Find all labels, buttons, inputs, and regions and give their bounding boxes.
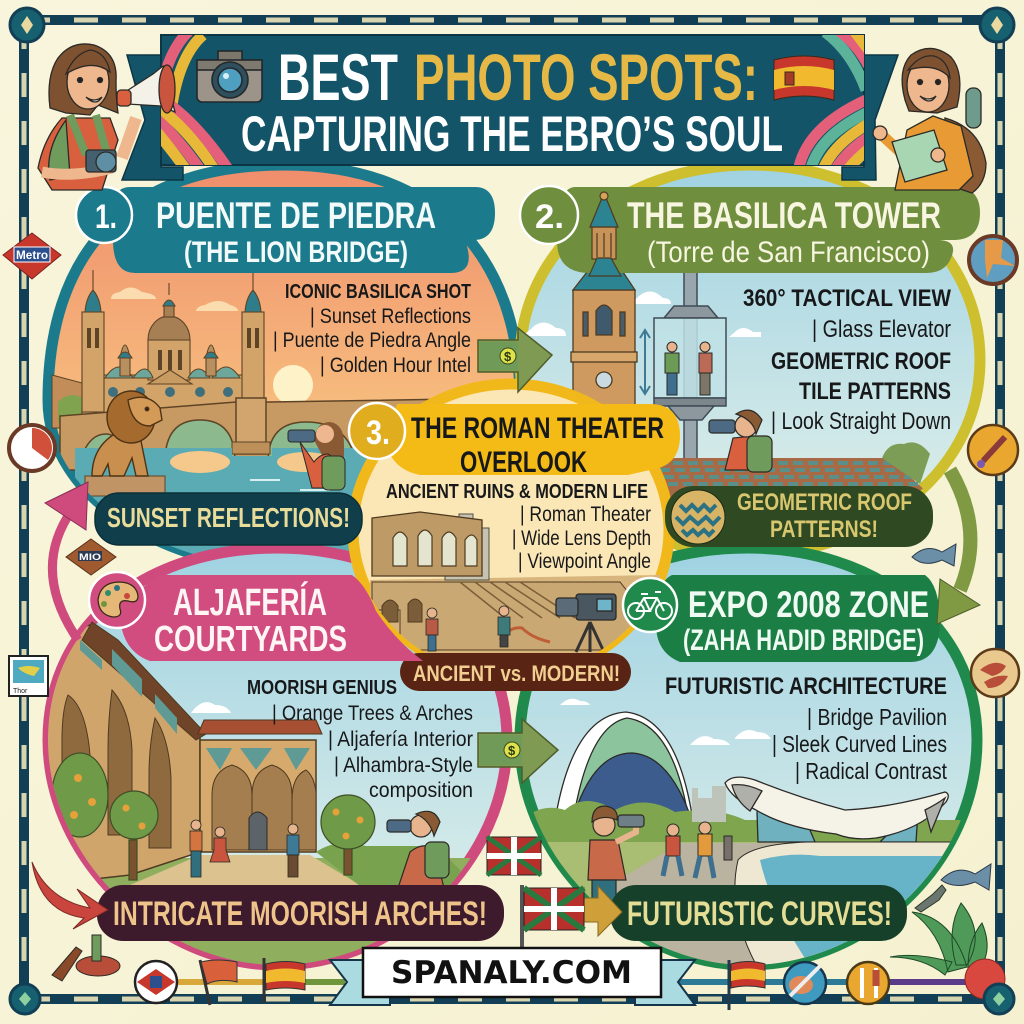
arrow: money arrow 4 to 5 xyxy=(478,719,558,783)
panel: spot 5 Expo 2008 zone xyxy=(520,548,980,973)
basilica xyxy=(82,270,264,420)
expo visitors xyxy=(663,822,732,878)
icon: camera xyxy=(197,51,262,102)
icon: palette roundel xyxy=(784,962,826,1004)
heading 3: THE ROMAN THEATER xyxy=(411,412,664,445)
text block 3: | Wide Lens Depth xyxy=(512,527,651,550)
illustration: expo architecture xyxy=(520,699,980,973)
callout: intricate moorish arches: INTRICATE MOORISH ARCHES! xyxy=(113,895,487,933)
text block 4: composition xyxy=(369,779,473,802)
title banner xyxy=(122,28,898,180)
icon: Spain flag xyxy=(774,56,834,100)
roof tiles xyxy=(660,442,930,498)
banner tails xyxy=(122,55,898,180)
glass elevator xyxy=(654,272,726,462)
text block 4: | Alhambra-Style xyxy=(334,754,473,777)
text block 5: | Bridge Pavilion xyxy=(807,704,947,730)
badge 3: 3. xyxy=(366,414,390,452)
lion statue xyxy=(92,391,162,476)
text block 5: FUTURISTIC ARCHITECTURE xyxy=(665,673,947,700)
callout: ancient vs modern xyxy=(400,653,631,691)
text block 5: | Sleek Curved Lines xyxy=(772,731,947,757)
header pill 3: OVERLOOK xyxy=(460,446,587,479)
photographer 5 xyxy=(588,806,644,910)
photographer on roof xyxy=(709,410,772,472)
badge 1: 1. xyxy=(95,198,117,236)
callout: geometric roof patterns: PATTERNS! xyxy=(770,516,878,543)
header band 4 xyxy=(89,572,423,661)
arrow: money arrow 1 to 2 xyxy=(478,328,552,392)
character: girl with map xyxy=(873,48,986,193)
badge 3 xyxy=(349,403,405,459)
text block 2 xyxy=(743,285,951,435)
panel: spot 3 Roman theater xyxy=(353,384,669,690)
callout: intricate moorish arches xyxy=(97,885,504,941)
callout: futuristic curves xyxy=(610,885,907,941)
text block 4: | Orange Trees & Arches xyxy=(272,702,473,725)
icon: metro diamond top xyxy=(3,233,61,279)
icon: clock xyxy=(9,425,55,471)
header pill 3 xyxy=(349,403,680,479)
callout: geometric roof patterns xyxy=(665,486,933,547)
badge 1 xyxy=(76,187,132,243)
photographer 4 xyxy=(387,811,449,888)
title text: BEST xyxy=(278,40,398,114)
icon: leaves xyxy=(890,903,987,975)
text block 4: | Aljafería Interior xyxy=(328,728,473,751)
character: girl with megaphone xyxy=(38,44,175,190)
text block 4: MOORISH GENIUS xyxy=(247,677,397,699)
icon: tile pattern xyxy=(671,490,725,544)
icon: flags bottom left xyxy=(200,958,305,1005)
icon: tools and food xyxy=(52,935,120,981)
arrow: olive curved 2 to 5 xyxy=(937,470,980,624)
text block 1 xyxy=(273,281,471,377)
illustration: basilica and lion bridge xyxy=(52,270,430,554)
water xyxy=(75,448,367,554)
banner: spanaly.com xyxy=(330,948,695,1005)
illustration: roman ruins xyxy=(370,511,660,653)
header pill 2 xyxy=(520,186,980,276)
text block 3: | Viewpoint Angle xyxy=(518,550,651,573)
text block 2: GEOMETRIC ROOF xyxy=(771,348,951,375)
rainbow corners xyxy=(161,35,864,165)
corner badge bottom right xyxy=(984,984,1014,1014)
title banner: CAPTURING THE EBRO’S SOUL xyxy=(241,106,783,162)
icon: compass xyxy=(969,236,1017,284)
theater visitors xyxy=(426,606,510,651)
bridge pavilion xyxy=(725,777,948,842)
text block 2: | Glass Elevator xyxy=(812,316,951,343)
header pill 1: (THE LION BRIDGE) xyxy=(184,236,408,269)
badge 2 xyxy=(520,186,578,244)
text block 1: ICONIC BASILICA SHOT xyxy=(285,281,471,303)
callout: futuristic curves: FUTURISTIC CURVES! xyxy=(627,895,892,933)
church tower xyxy=(571,272,637,415)
arrow: red curved xyxy=(32,862,108,929)
panel: spot 2 Basilica tower xyxy=(520,165,980,555)
arrow: money arrow 1 to 2: $ xyxy=(504,349,512,364)
icon: map card: Thor xyxy=(13,688,28,695)
icon: Basque flag small xyxy=(487,837,541,875)
arrow: gold xyxy=(578,886,622,936)
text block 3: ANCIENT RUINS & MODERN LIFE xyxy=(386,481,648,503)
icon: map card xyxy=(9,656,48,696)
icon: metro diamond middle: MIO xyxy=(79,552,101,562)
panel: spot 1 Puente de Piedra xyxy=(48,165,530,575)
text block 2: | Look Straight Down xyxy=(771,408,951,435)
expo dome xyxy=(556,712,692,815)
callout: ancient vs modern: ANCIENT vs. MODERN! xyxy=(413,661,620,686)
icon: flashlight xyxy=(915,885,946,912)
header pill 2: (Torre de San Francisco) xyxy=(647,236,930,269)
header pill 5 xyxy=(623,575,940,662)
stone bridge xyxy=(59,398,430,471)
text block 1: | Puente de Piedra Angle xyxy=(273,329,471,352)
banner: spanaly.com: SPANALY.COM xyxy=(391,955,632,991)
icon: cutlery roundel xyxy=(847,962,889,1004)
icon: food badge xyxy=(971,649,1019,697)
text block 3 xyxy=(386,481,651,573)
text block 4 xyxy=(247,677,473,802)
text block 2: 360° TACTICAL VIEW xyxy=(743,285,951,312)
plinth xyxy=(85,476,165,496)
tower spire over pill xyxy=(589,192,621,276)
heading 2: THE BASILICA TOWER xyxy=(627,195,941,236)
text block 2: TILE PATTERNS xyxy=(799,378,951,405)
arrow: pink curved 4 to 1 xyxy=(45,482,88,640)
elevator riders xyxy=(665,342,712,395)
header band 4: COURTYARDS xyxy=(154,618,347,659)
panel: spot 4 Aljaferia courtyards xyxy=(40,548,510,968)
bottom ribbon line xyxy=(175,979,985,985)
right lawn xyxy=(316,844,462,885)
heading 4: ALJAFERÍA xyxy=(173,580,327,624)
text block 5 xyxy=(665,673,948,784)
up and down arrow xyxy=(640,330,650,394)
text block 5: | Radical Contrast xyxy=(795,758,948,784)
header pill 5: (ZAHA HADID BRIDGE) xyxy=(683,624,924,657)
icon: red ball xyxy=(965,959,1005,999)
icon: fish lower xyxy=(941,864,991,890)
icon: metro diamond top: Metro xyxy=(16,248,48,262)
badge 2: 2. xyxy=(535,198,564,236)
callout: geometric roof patterns: GEOMETRIC ROOF xyxy=(737,489,912,516)
heading 5: EXPO 2008 ZONE xyxy=(688,584,929,625)
arrow: money arrow 4 to 5: $ xyxy=(508,743,516,758)
callout: sunset reflections: SUNSET REFLECTIONS! xyxy=(107,502,350,533)
icon: paint brush xyxy=(968,425,1018,475)
header pill 1 xyxy=(76,187,495,273)
illustration: tower, elevator and rooftop xyxy=(526,272,930,498)
icon: flag bottom right xyxy=(729,960,765,1010)
icon: palette badge xyxy=(89,572,145,628)
icon: metro roundel xyxy=(135,961,177,1003)
icon: Basque flag with pole xyxy=(522,885,584,948)
courtyard visitors xyxy=(190,820,299,877)
orange trees xyxy=(52,753,375,880)
text block 3: | Roman Theater xyxy=(520,503,651,526)
camera on tripod xyxy=(556,594,616,652)
illustration: moorish courtyard xyxy=(48,621,470,964)
photographer 1 xyxy=(288,422,345,490)
title banner: PHOTO SPOTS: xyxy=(414,40,758,114)
icon: fish upper xyxy=(912,544,956,566)
text block 1: | Sunset Reflections xyxy=(310,305,471,328)
heading 1: PUENTE DE PIEDRA xyxy=(156,195,436,236)
icon: bicycle badge xyxy=(623,578,677,632)
icon: metro diamond middle xyxy=(66,539,116,575)
left colonnade xyxy=(40,625,200,885)
callout: sunset reflections xyxy=(95,493,362,545)
text block 1: | Golden Hour Intel xyxy=(320,354,471,377)
water pool xyxy=(734,842,950,964)
central arcade xyxy=(200,740,316,852)
